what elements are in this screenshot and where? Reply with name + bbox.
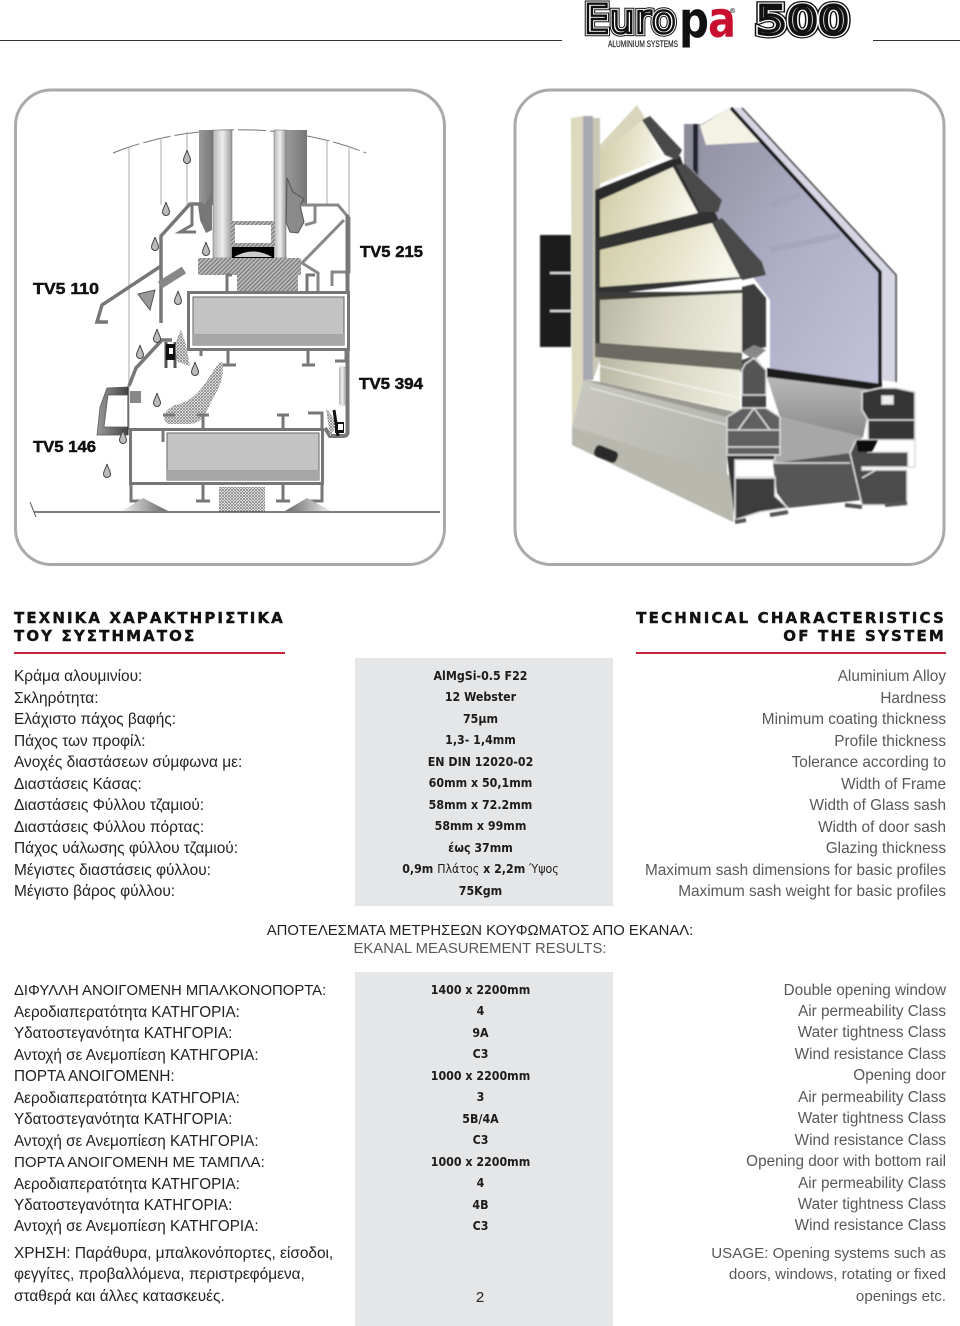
results values: 5B/4A [462, 1112, 499, 1126]
results values: C3 [473, 1133, 488, 1147]
glass pane [684, 108, 896, 396]
photo contents [540, 105, 915, 522]
cut profile: right section [850, 388, 915, 505]
Greek specification labels: Διαστάσεις Κάσας: [14, 776, 142, 792]
English results labels: Opening door [853, 1067, 946, 1084]
English results labels [746, 982, 946, 1234]
logo: Europa 500: 500 [756, 0, 849, 44]
Greek specification labels: Πάχος υάλωσης φύλλου τζαμιού: [14, 840, 238, 857]
specification values: AlMgSi-0.5 F22 [433, 669, 528, 683]
label: TV5 215: TV5 215 [360, 244, 423, 261]
usage text Greek [14, 1244, 333, 1304]
results values: 1000 x 2200mm [431, 1069, 530, 1083]
usage text English: doors, windows, rotating or fixed [729, 1266, 946, 1283]
Greek results labels: Αεροδιαπερατότητα ΚΑΤΗΓΟΡΙΑ: [14, 1004, 240, 1021]
usage text English: USAGE: Opening systems such as [711, 1244, 946, 1262]
Greek results labels: ΠΟΡΤΑ ΑΝΟΙΓΟΜΕΝΗ ΜΕ ΤΑΜΠΛΑ: [14, 1154, 265, 1171]
Greek results labels: Υδατοστεγανότητα ΚΑΤΗΓΟΡΙΑ: [14, 1111, 232, 1128]
results values: 9A [472, 1026, 489, 1040]
English specification labels: Glazing thickness [826, 840, 946, 857]
heading: English technical characteristics [636, 609, 946, 645]
Greek specification labels: Πάχος των προφίλ: [14, 732, 145, 750]
Greek specification labels: Κράμα αλουμινίου: [14, 668, 142, 685]
results values: 4 [477, 1004, 484, 1018]
Greek results labels: Αεροδιαπερατότητα ΚΑΤΗΓΟΡΙΑ: [14, 1090, 240, 1107]
English results labels: Wind resistance Class [795, 1217, 946, 1234]
English results labels: Air permeability Class [798, 1089, 946, 1106]
English specification labels: Width of door sash [818, 818, 946, 836]
Greek results labels [14, 982, 326, 1235]
drawing: glazing and frame section [30, 130, 440, 517]
results values: 1000 x 2200mm [431, 1155, 530, 1169]
Greek results labels: Υδατοστεγανότητα ΚΑΤΗΓΟΡΙΑ: [14, 1197, 232, 1214]
logo: Europa 500 [584, 0, 851, 49]
English results labels: Wind resistance Class [795, 1132, 946, 1149]
English specification labels: Minimum coating thickness [762, 711, 946, 728]
icon: water drops [104, 150, 210, 478]
specification values: 58mm x 99mm [435, 819, 526, 833]
specification values: 60mm x 50,1mm [429, 776, 532, 790]
logo: Europa 500: ALUMINIUM SYSTEMS [608, 39, 678, 49]
specification values: έως 37mm [448, 841, 513, 855]
logo: Europa 500: ® [729, 7, 736, 15]
English specification labels: Profile thickness [834, 732, 946, 750]
English specification labels: Hardness [880, 690, 946, 706]
heading: Greek technical characteristics: ΤΕΧΝΙΚΑ ΧΑΡΑΚΤΗΡΙΣΤΙΚΑ [14, 609, 285, 627]
header rule right [873, 40, 960, 41]
label: TV5 110: TV5 110 [33, 281, 99, 298]
Greek results labels: Αεροδιαπερατότητα ΚΑΤΗΓΟΡΙΑ: [14, 1176, 240, 1193]
cut profile: left section [727, 358, 788, 520]
English specification labels: Width of Frame [841, 776, 946, 792]
Greek specification labels [14, 668, 242, 900]
aluminium fins [583, 105, 745, 420]
specification values: 75μm [463, 712, 498, 726]
panel: profile cutaway photo [514, 88, 946, 566]
specification values: EN DIN 12020-02 [428, 755, 533, 769]
logo: Europa 500: 500 [756, 0, 849, 44]
English results labels: Air permeability Class [798, 1175, 946, 1192]
Greek specification labels: Διαστάσεις Φύλλου πόρτας: [14, 818, 204, 836]
usage text English: openings etc. [856, 1288, 946, 1304]
heading: English technical characteristics: OF THE SYSTEM [783, 627, 946, 645]
specification values: 0,9m Πλάτος x 2,2m Ύψος [402, 862, 559, 876]
Greek results labels: Αντοχή σε Ανεμοπίεση ΚΑΤΗΓΟΡΙΑ: [14, 1133, 259, 1150]
usage text Greek: σταθερά και άλλες κατασκευές. [14, 1288, 225, 1304]
English results labels: Water tightness Class [798, 1196, 946, 1213]
English specification labels: Tolerance according to [792, 754, 946, 771]
heading: EKANAL results [266, 923, 693, 957]
English results labels: Double opening window [784, 982, 946, 998]
rubber gasket [540, 235, 572, 347]
heading: Greek technical characteristics [14, 609, 285, 645]
Greek specification labels: Μέγιστο βάρος φύλλου: [14, 883, 175, 900]
usage text English [711, 1244, 946, 1304]
Greek specification labels: Ελάχιστο πάχος βαφής: [14, 711, 176, 728]
Greek specification labels: Σκληρότητα: [14, 690, 98, 706]
logo: Europa 500: 500 [756, 0, 849, 44]
Greek specification labels: Διαστάσεις Φύλλου τζαμιού: [14, 797, 204, 814]
results values: C3 [473, 1047, 488, 1061]
label: TV5 146: TV5 146 [33, 439, 96, 456]
specification values: 75Kgm [459, 884, 502, 898]
English specification labels: Aluminium Alloy [838, 668, 946, 685]
results values: 3 [477, 1090, 484, 1104]
Greek results labels: ΠΟΡΤΑ ΑΝΟΙΓΟΜΕΝΗ: [14, 1068, 175, 1085]
lower frame faces [572, 380, 735, 522]
Greek results labels: ΔΙΦΥΛΛΗ ΑΝΟΙΓΟΜΕΝΗ ΜΠΑΛΚΟΝΟΠΟΡΤΑ: [14, 982, 326, 998]
specification values: 58mm x 72.2mm [429, 798, 532, 812]
Greek results labels: Υδατοστεγανότητα ΚΑΤΗΓΟΡΙΑ: [14, 1025, 232, 1042]
heading: EKANAL results: EKANAL MEASUREMENT RESULTS: [354, 941, 606, 957]
panel: section drawing [14, 88, 446, 566]
English specification labels [645, 668, 946, 900]
English specification labels: Maximum sash dimensions for basic profiles [645, 862, 946, 878]
results values [431, 983, 530, 1233]
English specification labels: Width of Glass sash [810, 797, 946, 814]
label: TV5 394: TV5 394 [359, 376, 423, 393]
results values: 1400 x 2200mm [431, 983, 530, 997]
English specification labels: Maximum sash weight for basic profiles [678, 883, 946, 900]
results values: 4B [472, 1198, 489, 1212]
sill surfaces [767, 377, 873, 508]
heading: English technical characteristics: TECHNICAL CHARACTERISTICS [636, 609, 946, 627]
usage text Greek: ΧΡΗΣΗ: Παράθυρα, μπαλκονόπορτες, είσοδοι, [14, 1244, 333, 1262]
usage text Greek: φεγγίτες, προβαλλόμενα, περιστρεφόμενα, [14, 1266, 305, 1283]
specification values: 1,3- 1,4mm [445, 733, 516, 747]
heading rule left [14, 652, 285, 654]
seals [642, 116, 766, 420]
frame upright [571, 116, 600, 427]
English results labels: Water tightness Class [798, 1110, 946, 1127]
page number: 2 [476, 1289, 484, 1306]
English results labels: Wind resistance Class [795, 1046, 946, 1063]
English results labels: Air permeability Class [798, 1003, 946, 1020]
heading: EKANAL results: ΑΠΟΤΕΛΕΣΜΑΤΑ ΜΕΤΡΗΣΕΩΝ ΚΟΥΦΩΜΑΤΟΣ ΑΠΟ ΕΚΑΝΑΛ: [267, 923, 693, 939]
panel: values background [355, 658, 613, 906]
results values: C3 [473, 1219, 488, 1233]
Greek results labels: Αντοχή σε Ανεμοπίεση ΚΑΤΗΓΟΡΙΑ: [14, 1218, 259, 1235]
English results labels: Water tightness Class [798, 1024, 946, 1041]
Greek specification labels: Ανοχές διαστάσεων σύμφωνα με: [14, 754, 242, 771]
results values: 4 [477, 1176, 484, 1190]
specification values [402, 669, 559, 898]
heading rule right [636, 652, 946, 654]
English results labels: Opening door with bottom rail [746, 1153, 946, 1170]
Greek specification labels: Μέγιστες διαστάσεις φύλλου: [14, 862, 211, 878]
heading: Greek technical characteristics: ΤΟΥ ΣΥΣΤΗΜΑΤΟΣ [14, 627, 196, 645]
header rule left [0, 40, 562, 41]
panel: results background [355, 972, 613, 1326]
Greek results labels: Αντοχή σε Ανεμοπίεση ΚΑΤΗΓΟΡΙΑ: [14, 1047, 259, 1064]
specification values: 12 Webster [445, 690, 516, 704]
